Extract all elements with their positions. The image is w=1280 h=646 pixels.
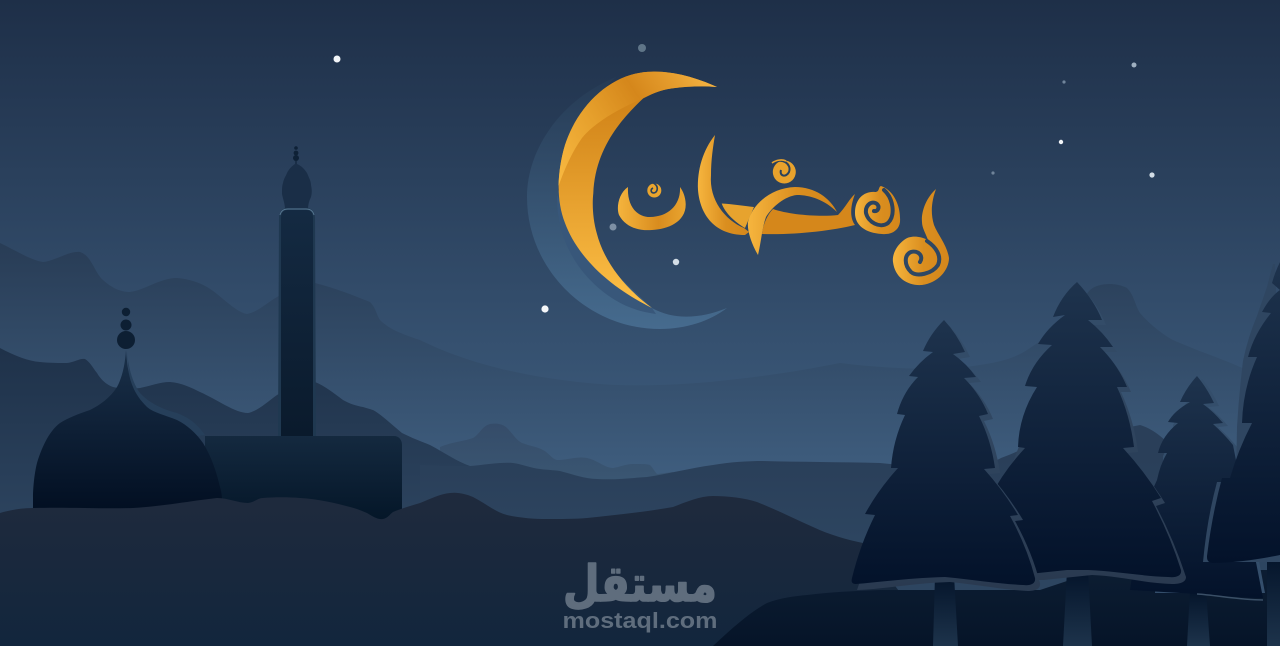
nun dot <box>647 183 661 198</box>
minaret cap <box>282 161 312 209</box>
mosque minaret <box>278 146 316 436</box>
letter meem <box>855 186 900 234</box>
minaret shaft <box>278 208 316 436</box>
letter dad body <box>762 194 855 234</box>
valley hill band <box>420 425 1280 600</box>
calligraphy: Ramadan <box>618 135 949 285</box>
crescent shadow inner shade <box>557 195 656 314</box>
ground under trees <box>713 570 1280 646</box>
small distant hill <box>440 424 673 490</box>
tree 2 outline <box>1004 287 1186 584</box>
watermark logo <box>562 555 718 633</box>
minaret finials <box>293 146 299 161</box>
tree 1 <box>852 320 1040 646</box>
tree 4 right edge <box>1203 262 1280 646</box>
dome highlight <box>127 352 205 440</box>
dome <box>33 350 222 512</box>
dad dot <box>772 160 796 184</box>
mosque building <box>205 436 402 522</box>
stars <box>334 44 1155 313</box>
letter alif <box>698 135 749 235</box>
crescent shadow <box>527 77 727 329</box>
crescent moon <box>527 72 727 329</box>
dome finials <box>117 308 135 349</box>
tree 4 trunk <box>1267 555 1280 646</box>
tree 3 canopy <box>1130 376 1263 598</box>
tree 3 <box>1130 376 1265 646</box>
tree 3 trunk <box>1187 590 1210 646</box>
crescent upper band <box>558 72 717 186</box>
mosque dome <box>33 308 222 512</box>
tree 2 trunk <box>1063 570 1092 646</box>
far mountains <box>0 243 1280 520</box>
crescent gold <box>559 72 717 308</box>
letter dad arc <box>748 187 837 255</box>
tree 4 canopy <box>1207 262 1280 563</box>
letter nun <box>618 187 686 230</box>
foreground hill <box>0 493 940 646</box>
letter raa swirl <box>893 189 949 285</box>
tree 1 canopy <box>852 320 1035 585</box>
tree 3 base line <box>1197 594 1263 600</box>
tree 3 outline <box>1155 379 1265 593</box>
tree 1 outline <box>857 325 1040 591</box>
tree 4 outline <box>1203 264 1280 562</box>
watermark arabic wordmark: مستقل <box>563 555 717 613</box>
tree 2 canopy <box>975 282 1181 577</box>
near mountains <box>0 348 470 530</box>
tree 1 trunk <box>933 575 958 646</box>
tree 2 <box>975 282 1186 646</box>
watermark latin wordmark: mostaql.com <box>562 608 718 633</box>
letter dad wedge <box>722 204 754 228</box>
